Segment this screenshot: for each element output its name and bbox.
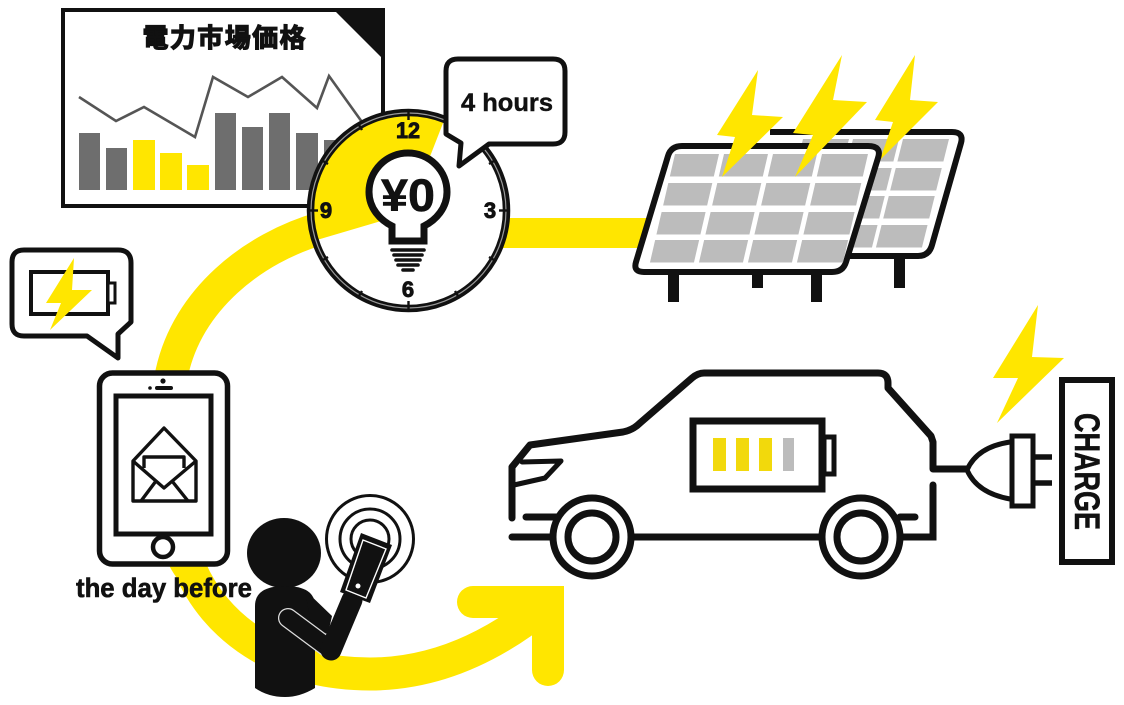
speech bubble: 4 hours: 4 hours bbox=[461, 89, 553, 117]
clock numerals bbox=[320, 118, 496, 302]
tablet screen bbox=[116, 396, 211, 534]
lightning bolts 1 and 2 bbox=[717, 55, 867, 177]
price line bbox=[79, 76, 362, 137]
chart title: 電力市場価格 bbox=[142, 23, 306, 53]
clock numerals: 12 bbox=[396, 118, 420, 143]
clock numerals: 9 bbox=[320, 198, 332, 223]
back solar panel bbox=[770, 132, 962, 288]
charging plug bbox=[967, 436, 1052, 506]
lightning bolt 3 bbox=[875, 55, 938, 160]
speech bubble: battery charging bbox=[12, 250, 131, 358]
rear wheel bbox=[822, 498, 900, 576]
bar chart bbox=[79, 113, 345, 190]
car battery bbox=[693, 421, 834, 489]
person holding smartphone bbox=[247, 496, 414, 697]
charger sign: CHARGE bbox=[1067, 413, 1106, 530]
electric car bbox=[512, 373, 967, 576]
front wheel bbox=[553, 498, 631, 576]
speech bubble: 4 hours bbox=[446, 59, 565, 166]
yellow connector: clock to solar panels bbox=[500, 218, 650, 248]
yellow flow arrow: day before to car bbox=[172, 228, 564, 674]
speaker and camera bbox=[148, 378, 173, 390]
caption: the day before: the day before bbox=[76, 573, 252, 603]
home button bbox=[153, 537, 173, 557]
person head bbox=[247, 518, 321, 588]
clock numerals: 3 bbox=[484, 198, 496, 223]
clock ticks bbox=[310, 112, 507, 309]
icon: battery bbox=[31, 272, 115, 314]
price label: ¥0 bbox=[381, 170, 435, 221]
clock with light bulb bbox=[290, 100, 507, 309]
clock numerals: 6 bbox=[402, 277, 414, 302]
tablet with mail message bbox=[100, 373, 228, 564]
icon: light bulb bbox=[369, 153, 447, 270]
icon: open envelope bbox=[133, 428, 196, 501]
corner fold bbox=[332, 8, 385, 61]
lightning bolt above plug bbox=[993, 305, 1064, 423]
charger sign bbox=[1062, 380, 1112, 562]
smartphone bbox=[340, 533, 392, 603]
solar panels bbox=[635, 55, 962, 302]
yellow four hour sector bbox=[314, 116, 444, 240]
signal rings bbox=[326, 496, 414, 582]
car lower outline bbox=[512, 485, 933, 537]
person body bbox=[255, 586, 315, 697]
arm bbox=[288, 600, 352, 650]
front solar panel bbox=[635, 146, 879, 302]
panel: electricity market price chart bbox=[63, 8, 385, 206]
headlight bbox=[514, 461, 561, 485]
icon: lightning bolt bbox=[46, 258, 92, 330]
car body outline bbox=[512, 373, 967, 518]
